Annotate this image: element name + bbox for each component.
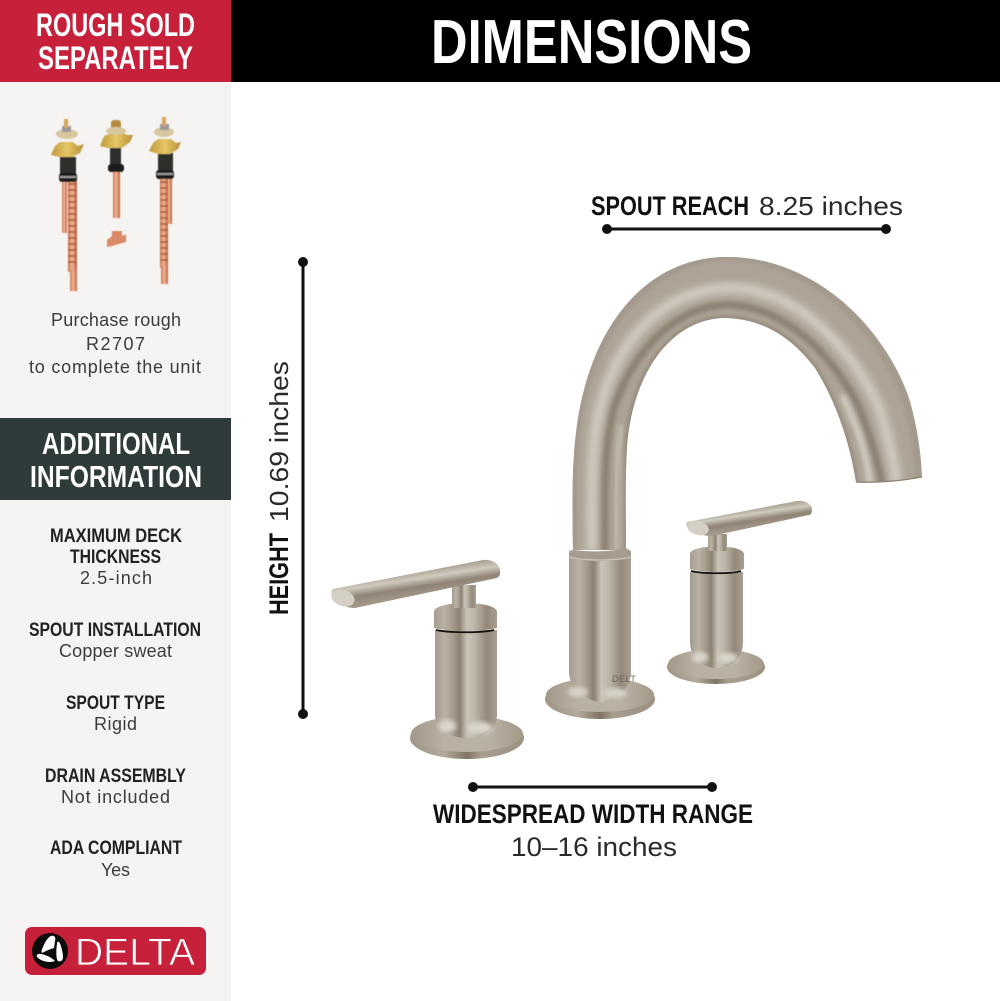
header: dimensions — [231, 0, 1000, 82]
header: dimensions: DIMENSIONS — [431, 8, 752, 77]
text: purchase rough: Purchase rough — [51, 310, 181, 330]
spec: spout installation: SPOUT INSTALLATION — [29, 620, 201, 641]
spec: spout installation — [29, 620, 201, 661]
logo: delta — [25, 927, 206, 975]
heading: additional information: INFORMATION — [30, 459, 202, 494]
dimension: spout reach: SPOUT REACH — [591, 191, 749, 221]
spec: ada compliant: ADA COMPLIANT — [50, 838, 182, 859]
panel: sidebar — [0, 0, 231, 1001]
spec: maximum deck thickness: MAXIMUM DECK — [50, 526, 182, 547]
dimension: widespread width range: WIDESPREAD WIDTH RANGE — [433, 799, 753, 829]
spec: ada compliant — [50, 838, 182, 880]
middle valve — [100, 120, 133, 218]
faucet: right handle — [667, 501, 812, 684]
spec: spout type: Rigid — [94, 714, 137, 734]
copper tee — [107, 231, 126, 247]
rough valve parts image — [51, 117, 181, 291]
header: rough sold separately: SEPARATELY — [38, 40, 193, 76]
text: purchase rough: R2707 — [86, 334, 145, 354]
spec: drain assembly — [45, 766, 186, 807]
faucet: left handle — [329, 560, 524, 759]
text: purchase rough: to complete the unit — [29, 357, 201, 377]
dimension: spout reach: 8.25 inches — [759, 191, 903, 221]
text: purchase rough — [29, 310, 201, 377]
right valve — [149, 117, 181, 284]
dimension: widespread width range: 10–16 inches — [511, 832, 677, 862]
faucet: spout body and base: DELT — [612, 674, 636, 684]
spec: spout type: SPOUT TYPE — [66, 693, 165, 714]
dimension: height: 10.69 inches — [264, 361, 294, 522]
spec: drain assembly: DRAIN ASSEMBLY — [45, 766, 186, 787]
dimension: widespread width range — [433, 782, 753, 862]
spec: maximum deck thickness: 2.5-inch — [80, 568, 152, 588]
logo: delta: DELTA — [75, 932, 196, 974]
spec: drain assembly: Not included — [61, 787, 170, 807]
faucet: spout body and base — [545, 548, 655, 719]
spec: spout type — [66, 693, 165, 734]
spec: ada compliant: Yes — [101, 860, 130, 880]
spec: spout installation: Copper sweat — [59, 641, 172, 661]
faucet: spout — [572, 257, 922, 550]
dimension: spout reach — [591, 191, 903, 234]
dimension: height: HEIGHT — [264, 533, 294, 615]
left valve — [51, 119, 84, 291]
dimension: height — [264, 257, 308, 719]
heading: additional information: ADDITIONAL — [42, 426, 190, 461]
spec: maximum deck thickness: THICKNESS — [70, 547, 161, 568]
heading: additional information — [0, 418, 231, 500]
spec: maximum deck thickness — [50, 526, 182, 588]
header: rough sold separately: ROUGH SOLD — [36, 7, 195, 43]
header: rough sold separately — [0, 0, 231, 82]
